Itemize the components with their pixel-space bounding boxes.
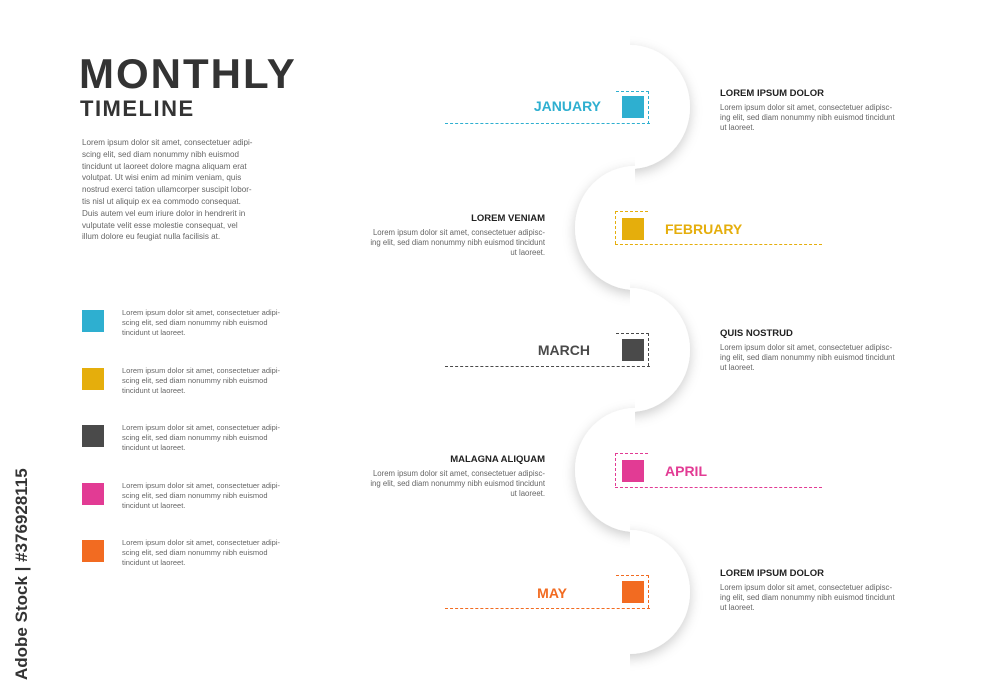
milestone: April: APRIL (665, 463, 707, 479)
intro text: scing elit, sed diam nonummy nibh euismod (82, 150, 239, 159)
intro text: tincidunt ut laoreet dolore magna aliquam erat (82, 162, 247, 171)
text: Lorem veniam: Lorem ipsum dolor sit amet, consectetuer adipisc- (373, 228, 545, 237)
legend item 3: Lorem ipsum dolor sit amet, consectetuer adipi- (122, 423, 280, 432)
text: Malagna aliquam: ut laoreet. (510, 489, 545, 498)
text: Lorem veniam: ing elit, sed diam nonummy nibh euismod tincidunt (370, 238, 545, 247)
intro text: volutpat. Ut wisi enim ad minim veniam, quis (82, 173, 241, 182)
legend item 3: tincidunt ut laoreet. (122, 443, 185, 452)
legend item 2: scing elit, sed diam nonummy nibh euismod (122, 376, 268, 385)
milestone: May (445, 575, 650, 609)
legend item 4: scing elit, sed diam nonummy nibh euismod (122, 491, 268, 500)
text: Lorem veniam: LOREM VENIAM (471, 213, 545, 224)
intro text: tis nisl ut aliquip ex ea commodo consequat. (82, 197, 241, 206)
text: Lorem ipsum dolor (Jan): Lorem ipsum dolor sit amet, consectetuer adipisc- (720, 103, 892, 112)
text: Lorem ipsum dolor (Jan) (720, 88, 895, 132)
title: MONTHLY (79, 50, 297, 97)
intro text: Lorem ipsum dolor sit amet, consectetuer adipi- (82, 138, 252, 147)
text: Quis nostrud: Lorem ipsum dolor sit amet, consectetuer adipisc- (720, 343, 892, 352)
watermark vertical text: Adobe Stock | #376928115 (12, 468, 31, 680)
legend item 2: tincidunt ut laoreet. (122, 386, 185, 395)
legend item 1 (82, 308, 280, 337)
text: Malagna aliquam (370, 454, 545, 498)
text: Lorem ipsum dolor (Jan): LOREM IPSUM DOLOR (720, 88, 824, 99)
text: Lorem ipsum dolor (May) (720, 568, 895, 612)
subtitle: TIMELINE (80, 96, 195, 121)
text: Lorem veniam (370, 213, 545, 257)
milestone: February (615, 211, 822, 245)
legend item 3: scing elit, sed diam nonummy nibh euismod (122, 433, 268, 442)
legend item 3 (82, 423, 280, 452)
text: Lorem ipsum dolor (Jan): ut laoreet. (720, 123, 755, 132)
legend item 5: tincidunt ut laoreet. (122, 558, 185, 567)
text: Lorem ipsum dolor (May): ing elit, sed diam nonummy nibh euismod tincidunt (720, 593, 895, 602)
legend item 5 (82, 538, 280, 567)
text: Malagna aliquam: Lorem ipsum dolor sit amet, consectetuer adipisc- (373, 469, 545, 478)
legend item 4: Lorem ipsum dolor sit amet, consectetuer adipi- (122, 481, 280, 490)
legend item 1: tincidunt ut laoreet. (122, 328, 185, 337)
text: Lorem ipsum dolor (May): Lorem ipsum dolor sit amet, consectetuer adipisc- (720, 583, 892, 592)
legend item 2: Lorem ipsum dolor sit amet, consectetuer adipi- (122, 366, 280, 375)
intro text: vulputate velit esse molestie consequat, vel (82, 221, 238, 230)
intro text: nostrud exerci tation ullamcorper suscipit lobor- (82, 185, 252, 194)
milestone: January (445, 91, 650, 124)
text: Quis nostrud: ing elit, sed diam nonummy nibh euismod tincidunt (720, 353, 895, 362)
intro text (82, 138, 252, 241)
legend item 1: scing elit, sed diam nonummy nibh euismod (122, 318, 268, 327)
text: Quis nostrud: QUIS NOSTRUD (720, 328, 793, 339)
intro text: illum dolore eu feugiat nulla facilisis at. (82, 232, 220, 241)
milestone: March (445, 333, 650, 367)
legend item 1: Lorem ipsum dolor sit amet, consectetuer adipi- (122, 308, 280, 317)
text: Malagna aliquam: MALAGNA ALIQUAM (450, 454, 545, 465)
intro text: Duis autem vel eum iriure dolor in hendrerit in (82, 209, 245, 218)
text: Quis nostrud: ut laoreet. (720, 363, 755, 372)
text: Malagna aliquam: ing elit, sed diam nonummy nibh euismod tincidunt (370, 479, 545, 488)
milestone: March: MARCH (538, 342, 590, 358)
legend item 2 (82, 366, 280, 395)
text: Lorem ipsum dolor (Jan): ing elit, sed diam nonummy nibh euismod tincidunt (720, 113, 895, 122)
legend item 5: Lorem ipsum dolor sit amet, consectetuer adipi- (122, 538, 280, 547)
legend item 5: scing elit, sed diam nonummy nibh euismod (122, 548, 268, 557)
text: Quis nostrud (720, 328, 895, 372)
text: Lorem ipsum dolor (May): LOREM IPSUM DOLOR (720, 568, 824, 579)
milestone: January: JANUARY (534, 98, 601, 114)
legend item 4: tincidunt ut laoreet. (122, 501, 185, 510)
milestone: February: FEBRUARY (665, 221, 742, 237)
milestone: May: MAY (537, 585, 567, 601)
text: Lorem veniam: ut laoreet. (510, 248, 545, 257)
snake timeline background (570, 44, 696, 664)
milestone: April (615, 453, 822, 488)
legend item 4 (82, 481, 280, 510)
text: Lorem ipsum dolor (May): ut laoreet. (720, 603, 755, 612)
legend (82, 308, 280, 567)
